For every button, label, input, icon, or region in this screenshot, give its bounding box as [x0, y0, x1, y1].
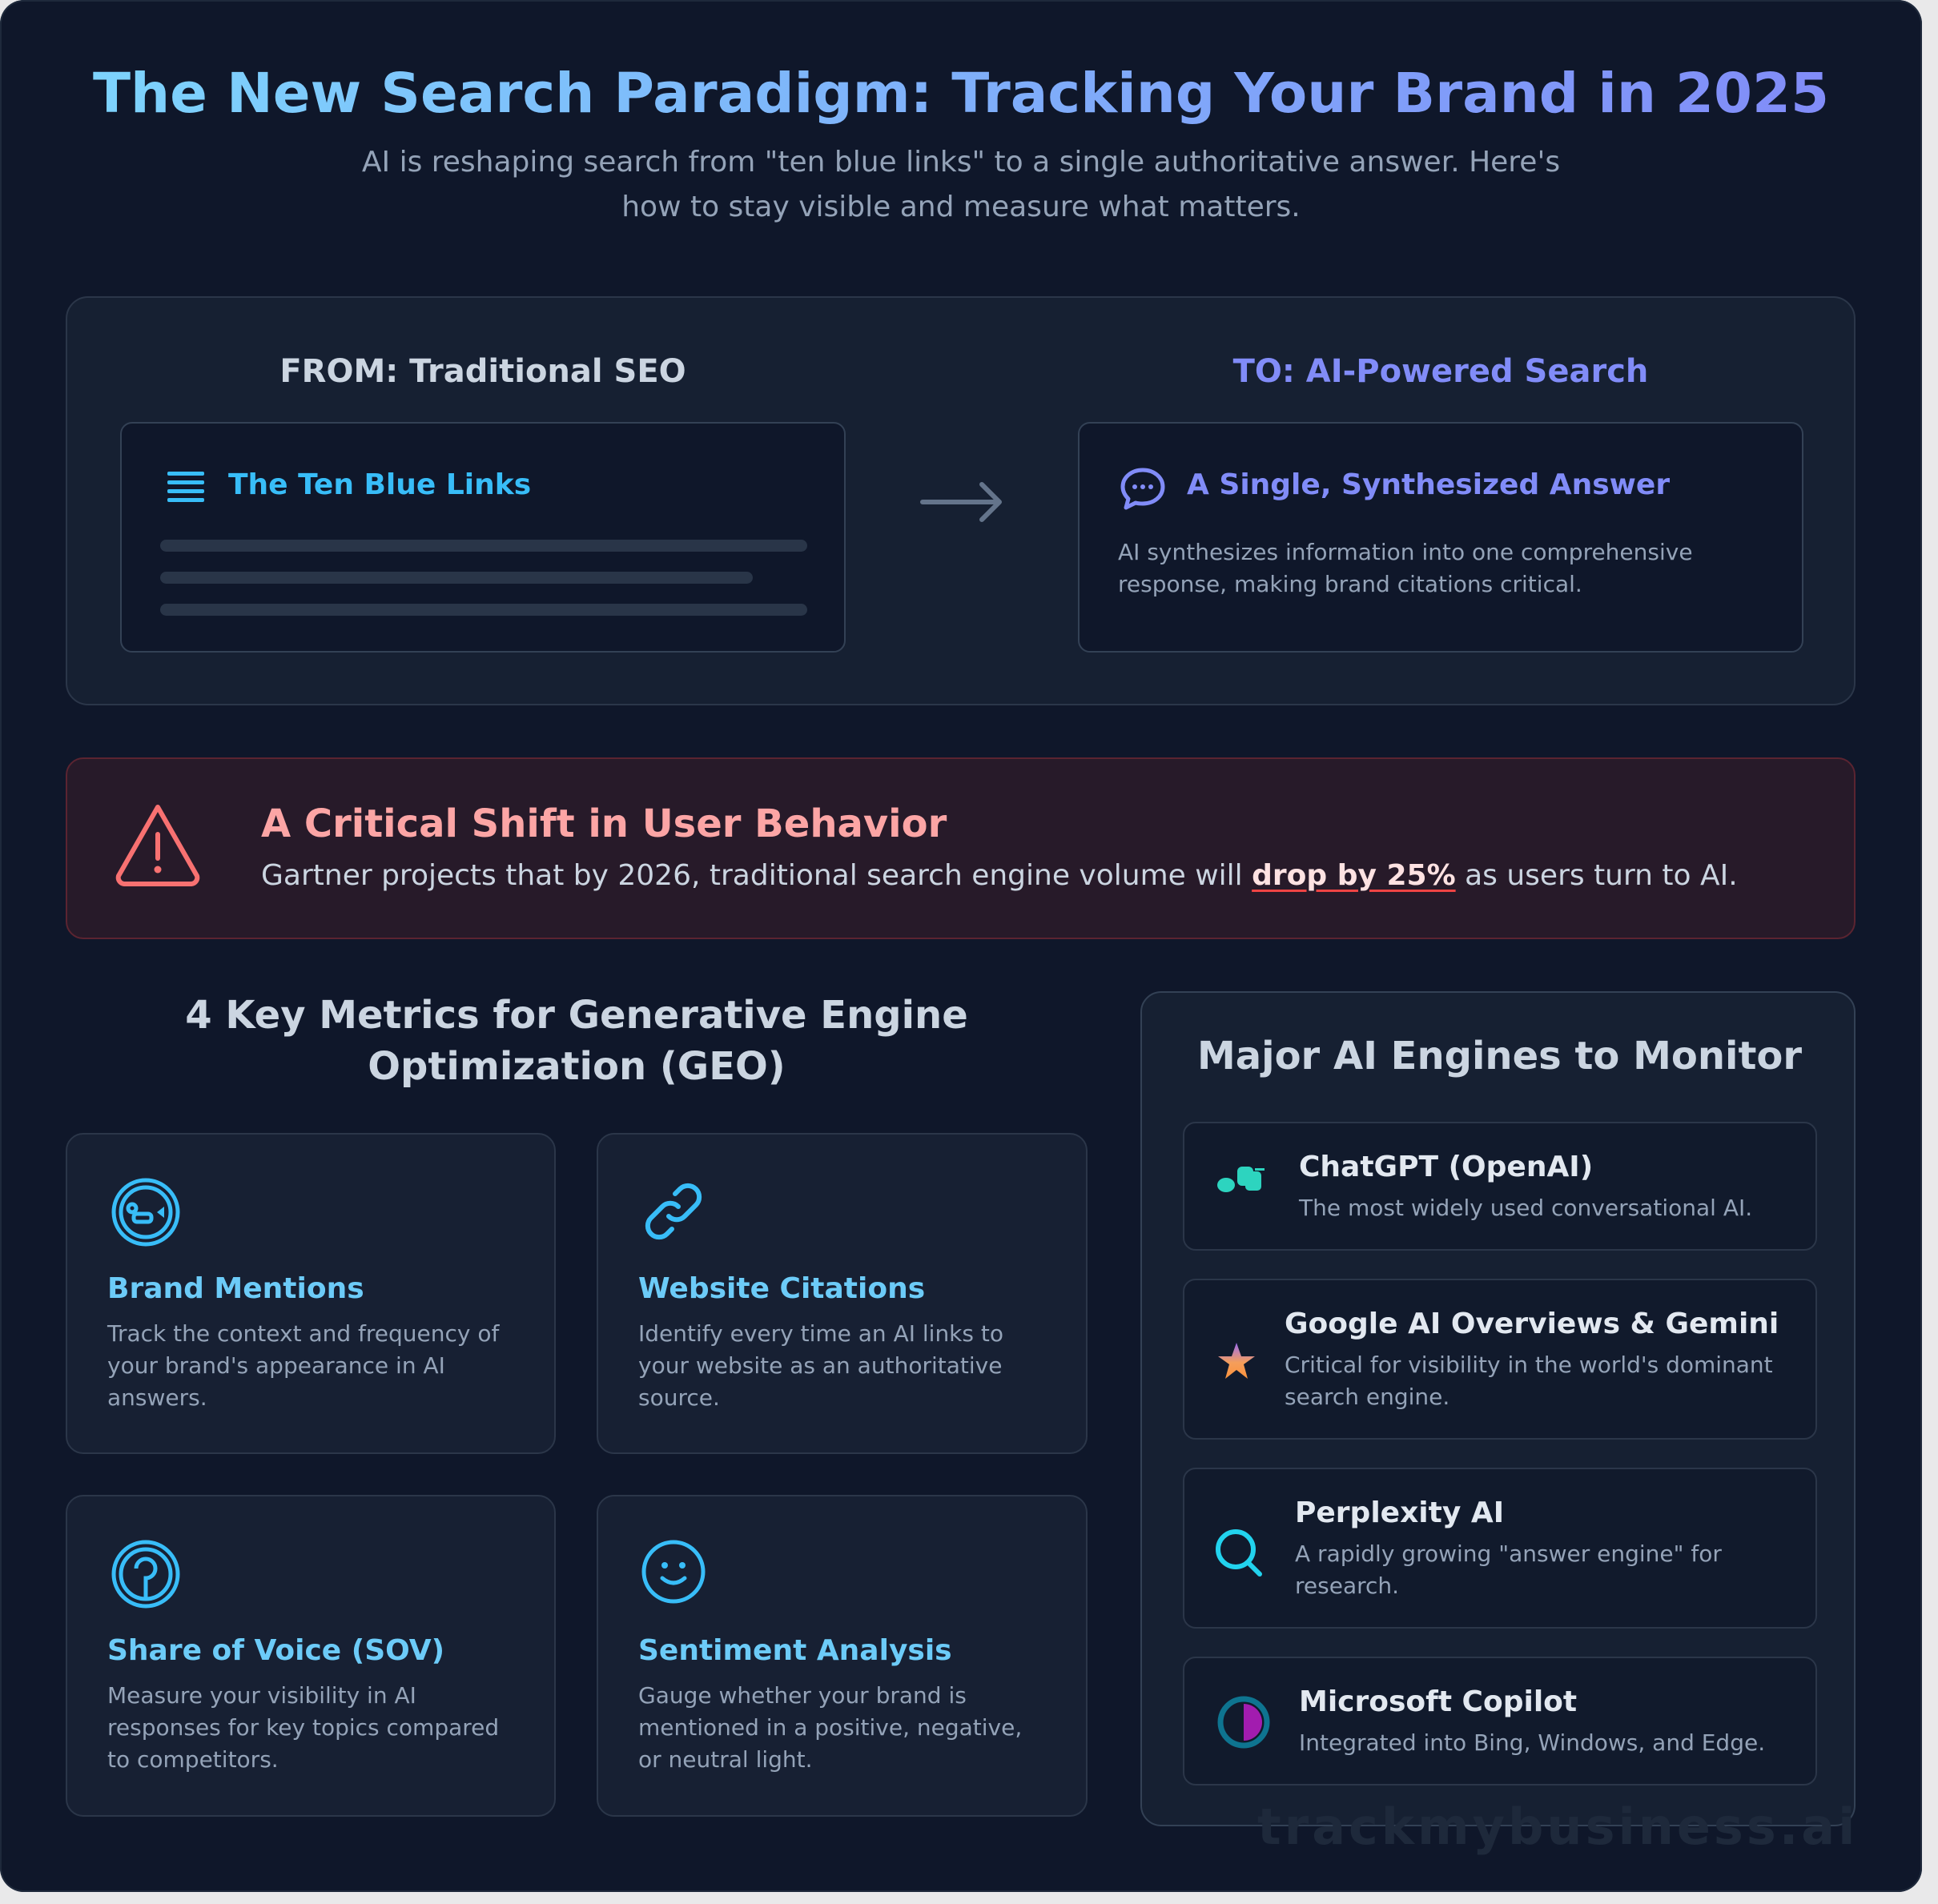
box: ten blue links	[120, 422, 846, 653]
heading: engines: Major AI Engines to Monitor	[1197, 1034, 1802, 1079]
card: website citations	[597, 1133, 1088, 1454]
card: website citations: source.	[638, 1384, 720, 1411]
card: share of voice: responses for key topics compared	[107, 1714, 499, 1741]
heading: critical shift: A Critical Shift in User Behavior	[261, 801, 947, 846]
engine: perplexity: A rapidly growing "answer engine" for	[1295, 1540, 1722, 1567]
engine: perplexity	[1183, 1468, 1817, 1629]
icon: warning	[115, 805, 200, 886]
title: The New Search Paradigm: Tracking Your Brand in 2025	[93, 62, 1829, 126]
box: synthesized answer	[1078, 422, 1803, 653]
icon: copilot	[1217, 1696, 1270, 1749]
arrow	[920, 482, 1002, 522]
engine: chatgpt	[1183, 1122, 1817, 1251]
text: brand mentions: Brand Mentions	[107, 1272, 364, 1305]
card: share of voice	[66, 1495, 556, 1817]
icon: pie	[112, 1540, 179, 1608]
heading: from: FROM: Traditional SEO	[279, 353, 686, 390]
engine: copilot: Integrated into Bing, Windows, and Edge.	[1299, 1729, 1765, 1756]
engine: google	[1183, 1279, 1817, 1440]
text: gartner: Gartner projects that by 2026, traditional search engine volume will drop by 25% as users turn to AI.	[261, 859, 1738, 892]
engine: google: Critical for visibility in the world's dominant	[1285, 1352, 1773, 1378]
icon: chat bubble	[1121, 468, 1164, 509]
engine: google: search engine.	[1285, 1384, 1449, 1410]
engine: perplexity: research.	[1295, 1573, 1399, 1599]
icon: smiley	[642, 1540, 705, 1603]
text: single answer title: A Single, Synthesized Answer	[1187, 468, 1670, 501]
card: share of voice: Measure your visibility in AI	[107, 1682, 416, 1709]
text: ten blue links: The Ten Blue Links	[228, 468, 531, 501]
text: share of voice: Share of Voice (SOV)	[107, 1634, 444, 1667]
card: website citations: Identify every time an AI links to	[638, 1320, 1003, 1347]
subtitle: AI is reshaping search from "ten blue links" to a single authoritative answer. Here's	[362, 146, 1560, 179]
icon: search	[1216, 1529, 1262, 1577]
card: share of voice: to competitors.	[107, 1746, 279, 1773]
icon: brand mentions	[112, 1179, 179, 1246]
text: single answer description: AI synthesizes information into one comprehensive	[1118, 539, 1693, 565]
watermark: trackmybusiness.ai	[1257, 1798, 1858, 1856]
card: sentiment	[597, 1495, 1088, 1817]
panel: AI engines	[1140, 991, 1856, 1826]
engine: copilot	[1183, 1657, 1817, 1786]
heading: 4 key metrics	[185, 993, 968, 1089]
icon: gemini star	[1218, 1343, 1255, 1379]
text: website citations: Website Citations	[638, 1272, 925, 1305]
icon: chatgpt	[1217, 1167, 1265, 1192]
text: single answer description: response, making brand citations critical.	[1118, 571, 1582, 597]
text: sentiment: Sentiment Analysis	[638, 1634, 952, 1667]
card: brand mentions	[66, 1133, 556, 1454]
subtitle: how to stay visible and measure what matters.	[621, 191, 1301, 223]
engine: perplexity: Perplexity AI	[1295, 1496, 1504, 1529]
icon: list	[167, 472, 204, 502]
card: sentiment: or neutral light.	[638, 1746, 813, 1773]
card: website citations: your website as an authoritative	[638, 1352, 1002, 1379]
text: single answer description	[1118, 539, 1693, 597]
card: brand mentions: your brand's appearance in AI	[107, 1352, 445, 1379]
card: sentiment: Gauge whether your brand is	[638, 1682, 967, 1709]
card: brand mentions: Track the context and frequency of	[107, 1320, 499, 1347]
link bars	[160, 540, 807, 616]
panel: from/to	[66, 296, 1856, 705]
heading: 4 key metrics: Optimization (GEO)	[368, 1044, 786, 1089]
subtitle	[362, 146, 1560, 223]
card: brand mentions: answers.	[107, 1384, 207, 1411]
icon: link	[645, 1183, 702, 1239]
panel: critical shift alert	[66, 757, 1856, 939]
heading: to: TO: AI-Powered Search	[1233, 353, 1648, 390]
heading: 4 key metrics: 4 Key Metrics for Generative Engine	[185, 993, 968, 1038]
engine: chatgpt: ChatGPT (OpenAI)	[1299, 1151, 1593, 1183]
card: sentiment: mentioned in a positive, negative,	[638, 1714, 1022, 1741]
engine: google: Google AI Overviews & Gemini	[1285, 1307, 1779, 1340]
engine: chatgpt: The most widely used conversational AI.	[1299, 1195, 1752, 1221]
engine: copilot: Microsoft Copilot	[1299, 1685, 1577, 1718]
